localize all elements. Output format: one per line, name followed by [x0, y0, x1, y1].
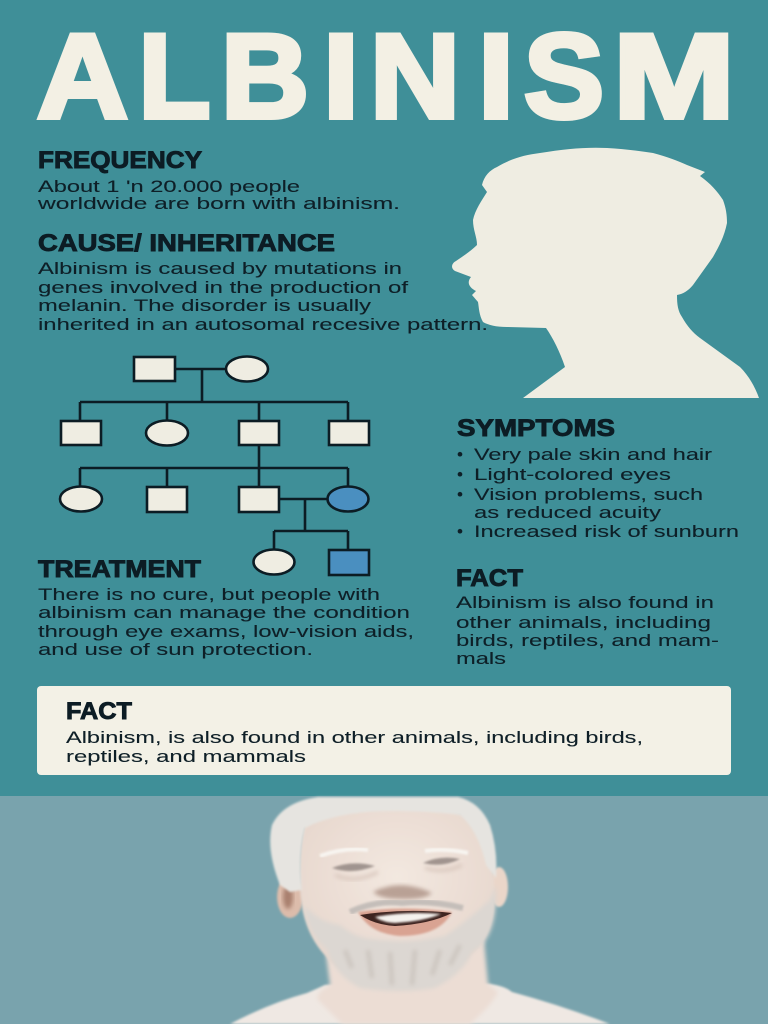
title: I: [478, 10, 514, 144]
heading: treatment: TREATMENT: [38, 556, 201, 583]
background panel: [0, 0, 768, 797]
symptoms list: Very pale skin and hair: [474, 445, 712, 464]
fact text: birds, reptiles, and mam-: [456, 631, 719, 650]
heading: symptoms: SYMPTOMS: [457, 415, 615, 442]
neck: [318, 940, 498, 1024]
text block: treatment: [38, 556, 414, 659]
text block: frequency: [37, 147, 400, 213]
treatment text: albinism can manage the condition: [38, 603, 410, 622]
text block: symptoms: [457, 415, 739, 541]
treatment text: and use of sun protection.: [38, 640, 313, 659]
panel: fact callout: [37, 686, 731, 775]
symptoms list: [457, 445, 739, 541]
frequency text: About 1 'n 20.000 people: [38, 177, 300, 196]
fact text: Albinism is also found in: [456, 593, 714, 612]
title: B: [221, 10, 309, 144]
treatment text: There is no cure, but people with: [38, 585, 380, 604]
fact text: [456, 593, 719, 668]
chart: pedigree family tree: [60, 356, 369, 575]
symptoms list: •: [457, 522, 463, 541]
callout heading: FACT: [66, 698, 132, 725]
symptoms list: Increased risk of sunburn: [474, 522, 739, 541]
symptoms list: •: [457, 465, 463, 484]
callout text: [66, 728, 643, 766]
nose: [373, 885, 432, 899]
fact text: other animals, including: [456, 613, 711, 632]
callout text: reptiles, and mammals: [66, 747, 306, 766]
fact text: mals: [456, 649, 506, 668]
text block: cause and inheritance: [38, 230, 488, 334]
cause text: genes involved in the production of: [38, 278, 408, 297]
treatment text: [38, 585, 414, 659]
shirt: [230, 984, 610, 1024]
heading: cause / inheritance: CAUSE/ INHERITANCE: [38, 230, 335, 257]
moustache: [350, 902, 463, 912]
panel: photo of man with albinism: [0, 796, 768, 1024]
cause text: Albinism is caused by mutations in: [38, 259, 402, 278]
eyebrows: [320, 849, 468, 856]
frequency text: [37, 177, 400, 213]
cause text: inherited in an autosomal recesive pattern.: [38, 315, 488, 334]
symptoms list: •: [457, 445, 463, 464]
eyes: [332, 858, 460, 871]
beard texture: [345, 945, 460, 985]
mouth: [358, 908, 452, 936]
face: [300, 805, 494, 975]
cause text: [38, 259, 488, 334]
title: A: [37, 10, 128, 144]
beard: [304, 885, 496, 991]
symptoms list: •: [457, 485, 463, 504]
title: M: [613, 10, 735, 144]
hair: [270, 797, 496, 892]
heading: fact: FACT: [456, 565, 523, 592]
ears: [277, 867, 508, 918]
title: S: [524, 10, 604, 144]
text block: fact right: [456, 565, 719, 668]
symptoms list: as reduced acuity: [474, 503, 662, 522]
symptoms list: Light-colored eyes: [474, 465, 671, 484]
title: I: [323, 10, 359, 144]
title: L: [138, 10, 210, 144]
callout text: Albinism, is also found in other animals, including birds,: [66, 728, 643, 747]
icon: head silhouette: [452, 148, 759, 398]
cause text: melanin. The disorder is usually: [38, 296, 372, 315]
eye socket shading: [335, 865, 462, 879]
symptoms list: Vision problems, such: [474, 485, 703, 504]
heading: frequency: FREQUENCY: [38, 147, 202, 174]
title: N: [370, 10, 460, 144]
frequency text: worldwide are born with albinism.: [37, 194, 400, 213]
treatment text: through eye exams, low-vision aids,: [38, 622, 414, 641]
